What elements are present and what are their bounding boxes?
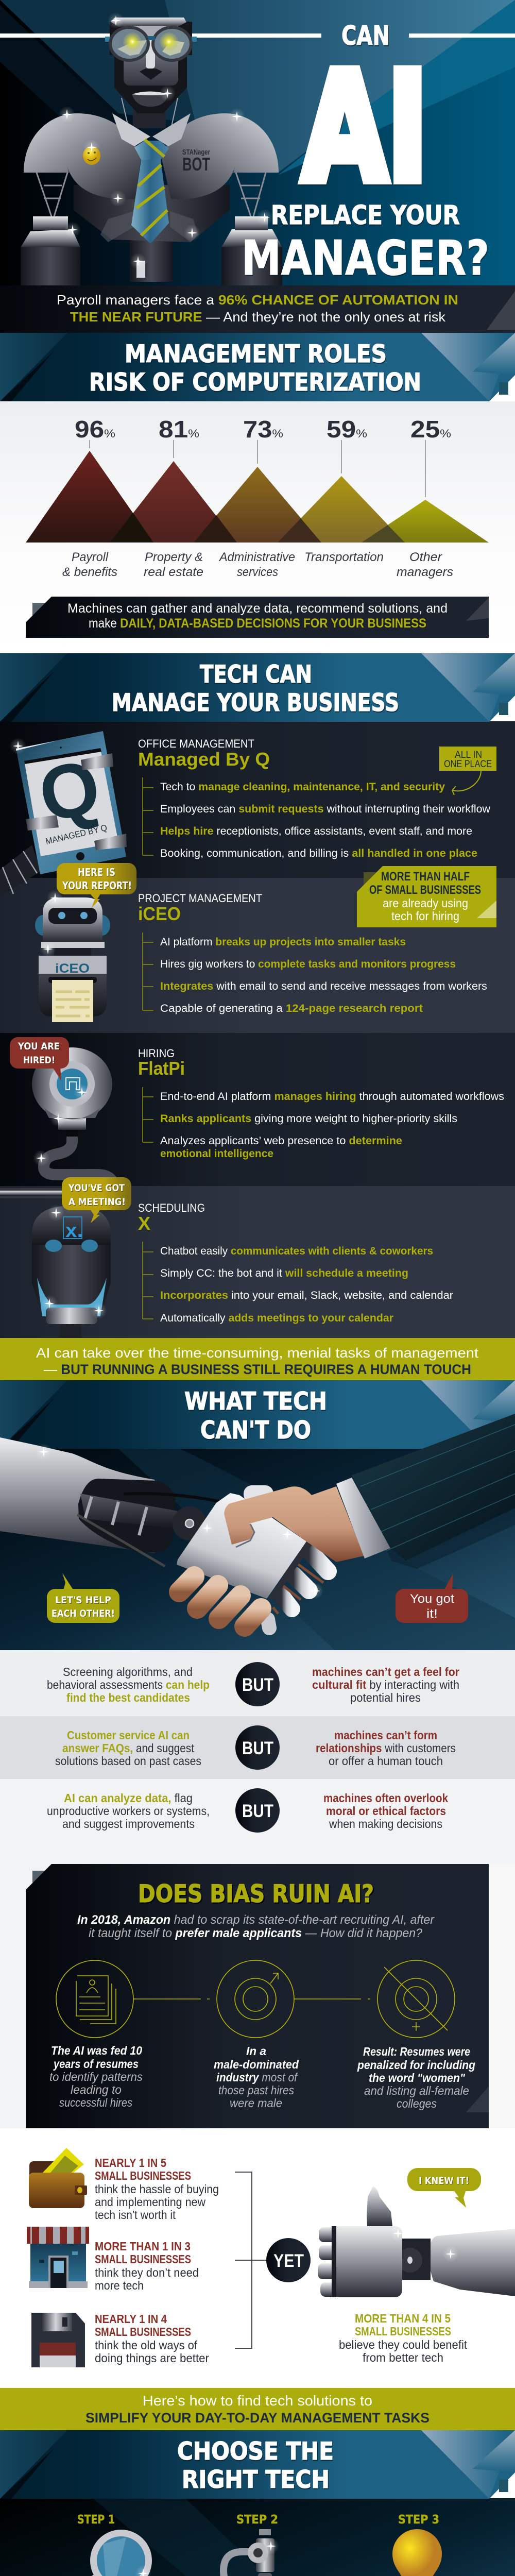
row 1 right: cultural fit by interacting with bbox=[312, 1678, 459, 1691]
heading line 1: WHAT TECH bbox=[184, 1387, 327, 1416]
value 25: 25 % bbox=[410, 416, 451, 443]
note: all in one place: ONE PLACE bbox=[444, 759, 492, 770]
bullets: Simply CC: the bot and it will schedule a meeting bbox=[160, 1267, 408, 1279]
panel: flatpi bbox=[10, 1037, 504, 1185]
row 3 left: AI can analyze data, flag bbox=[64, 1791, 193, 1805]
badge but 1 bbox=[235, 1662, 280, 1706]
row 2 right bbox=[316, 1728, 456, 1768]
panel backgrounds: tech list bbox=[0, 721, 515, 1338]
row 2 left: answer FAQs, and suggest bbox=[62, 1741, 195, 1755]
row 1 left: Screening algorithms, and bbox=[63, 1665, 193, 1679]
icon: iceo robot bbox=[35, 890, 110, 1022]
category labels: managers bbox=[397, 565, 453, 579]
callout: more than half: are already using bbox=[383, 896, 468, 910]
category labels: Administrative bbox=[218, 550, 295, 564]
q logo: Q bbox=[32, 743, 108, 839]
row 3 left bbox=[47, 1791, 210, 1831]
bullets: emotional intelligence bbox=[160, 1148, 273, 1160]
callout: more than half: tech for hiring bbox=[391, 909, 459, 923]
badge but 2: BUT bbox=[242, 1738, 273, 1758]
callout: more than half bbox=[357, 866, 496, 927]
text: fed ten years: years of resumes bbox=[53, 2057, 139, 2071]
bullets: Capable of generating a 124-page research report bbox=[160, 1003, 423, 1014]
step label: STEP 2 bbox=[236, 2513, 278, 2527]
value 96: 96 % bbox=[75, 416, 115, 443]
intro bbox=[77, 1913, 435, 1940]
speech bubble: meeting bbox=[62, 1177, 131, 1223]
text: hassle stat: think the hassle of buying bbox=[95, 2182, 219, 2196]
icon: light bulb bbox=[392, 2529, 442, 2576]
callout: daily decisions: make DAILY, DATA-BASED DECISIONS FOR YOUR BUSINESS bbox=[89, 616, 426, 631]
value 59: 59 % bbox=[327, 416, 367, 443]
category labels: services bbox=[237, 565, 278, 579]
icon: wallet bbox=[29, 2148, 87, 2208]
text: old ways stat: think the old ways of bbox=[95, 2338, 198, 2352]
speech bubble: help each other bbox=[47, 1573, 119, 1623]
row 1 right bbox=[312, 1665, 459, 1704]
title rule left bbox=[0, 33, 321, 38]
bullets: Hires gig workers to complete tasks and monitors progress bbox=[160, 958, 456, 970]
step 2 bbox=[193, 2513, 321, 2576]
bullet tree bbox=[143, 933, 153, 1010]
bullets: Chatbot easily communicates with clients & coworkers bbox=[160, 1245, 433, 1257]
speech bubble: hired: HIRED! bbox=[23, 1055, 55, 1066]
category: PROJECT MANAGEMENT bbox=[138, 892, 262, 905]
text: fed ten years: leading to bbox=[71, 2083, 122, 2096]
title: replace your: REPLACE YOUR bbox=[271, 200, 460, 231]
speech bubble: i knew it: I KNEW IT! bbox=[419, 2175, 469, 2187]
callout: daily decisions: Machines can gather and analyze data, recommend solutions, and bbox=[67, 601, 448, 616]
step 1 bbox=[16, 2513, 176, 2576]
bullets: Booking, communication, and billing is all handled in one place bbox=[160, 848, 477, 859]
text: fed ten years: The AI was fed 10 bbox=[51, 2044, 142, 2057]
speech bubble: meeting: A MEETING! bbox=[68, 1196, 126, 1208]
step label: STEP 1 bbox=[77, 2513, 115, 2527]
speech bubble: meeting: YOU'VE GOT bbox=[68, 1182, 125, 1194]
speech bubble: help each other: EACH OTHER! bbox=[52, 1608, 115, 1619]
text: hassle stat: tech isn't worth it bbox=[95, 2208, 176, 2222]
banner: management roles bbox=[0, 333, 515, 401]
speech bubble: help each other: LET'S HELP bbox=[55, 1595, 111, 1606]
speech bubble: hired bbox=[10, 1037, 69, 1081]
bullets: Helps hire receptionists, office assistants, event staff, and more bbox=[160, 825, 472, 837]
icon: magnifying glass bbox=[46, 2530, 152, 2576]
category labels bbox=[62, 550, 453, 579]
note: all in one place: ALL IN bbox=[455, 750, 482, 760]
band: find tech solutions: SIMPLIFY YOUR DAY-TO-DAY MANAGEMENT TASKS bbox=[85, 2410, 430, 2426]
banner: choose the right tech bbox=[0, 2430, 515, 2499]
row 2 right: or offer a human touch bbox=[329, 1754, 443, 1768]
bullet tree bbox=[143, 1242, 153, 1319]
text: fed ten years bbox=[49, 2044, 143, 2109]
row 1 left bbox=[47, 1665, 210, 1704]
illustration: handshake bbox=[0, 1414, 515, 1628]
badge yet bbox=[266, 2238, 311, 2282]
speech bubble: you got it: You got bbox=[410, 1592, 454, 1606]
icon: microscope bbox=[224, 2529, 285, 2576]
text: four in five stat bbox=[339, 2312, 468, 2364]
bracket connector bbox=[235, 2172, 268, 2348]
text: four in five stat: believe they could benefit bbox=[339, 2338, 468, 2351]
bullets bbox=[160, 1245, 453, 1324]
speech bubble: you got it: it! bbox=[426, 1607, 438, 1621]
note: all in one place bbox=[439, 747, 496, 771]
text: hassle stat: SMALL BUSINESSES bbox=[95, 2169, 191, 2182]
category labels: Payroll bbox=[72, 550, 109, 564]
text: male dominated: were male bbox=[230, 2096, 282, 2110]
row 2 right: relationships with customers bbox=[316, 1741, 456, 1755]
text: no more tech stat: more tech bbox=[95, 2279, 144, 2292]
speech bubble: i knew it bbox=[407, 2168, 481, 2208]
section: risk chart bbox=[0, 333, 515, 653]
text: result: and listing all-female bbox=[364, 2084, 469, 2097]
product name: iCEO bbox=[138, 903, 181, 924]
text: male dominated: those past hires bbox=[218, 2083, 294, 2097]
text: male dominated: In a bbox=[246, 2044, 266, 2058]
bullets bbox=[160, 781, 491, 859]
icon: floppy disk bbox=[31, 2313, 85, 2367]
bullet tree bbox=[143, 777, 153, 855]
speech bubble: report: YOUR REPORT! bbox=[62, 879, 132, 892]
text: result: penalized for including bbox=[357, 2058, 475, 2072]
icon: male symbol bbox=[217, 1960, 294, 2038]
bullets: Incorporates into your email, Slack, website, and calendar bbox=[160, 1290, 453, 1301]
callout: daily decisions bbox=[26, 597, 489, 638]
icon: tablet robot bbox=[0, 731, 127, 897]
intro: it taught itself to prefer male applicants — How did it happen? bbox=[89, 1926, 423, 1940]
row 2 left: solutions based on past cases bbox=[55, 1754, 201, 1768]
banner: tech can manage bbox=[0, 653, 515, 722]
text: result: Result: Resumes were bbox=[363, 2045, 470, 2058]
badge but 2 bbox=[235, 1725, 280, 1770]
connector 1 bbox=[133, 1998, 210, 1999]
speech bubble: report: HERE IS bbox=[78, 866, 115, 878]
speech bubble: you got it bbox=[396, 1573, 468, 1623]
icon: x robot bbox=[0, 1188, 111, 1338]
text: four in five stat: SMALL BUSINESSES bbox=[355, 2325, 451, 2338]
value 73: 73% bbox=[243, 416, 283, 443]
category: SCHEDULING bbox=[138, 1201, 205, 1214]
text: old ways stat: doing things are better bbox=[95, 2351, 209, 2365]
bullets: End-to-end AI platform manages hiring through automated workflows bbox=[160, 1091, 504, 1103]
row 3 left: unproductive workers or systems, bbox=[47, 1804, 210, 1818]
row 2 right: machines can’t form bbox=[334, 1728, 437, 1742]
text: four in five stat: MORE THAN 4 IN 5 bbox=[355, 2312, 451, 2325]
row 1 left: find the best candidates bbox=[66, 1691, 190, 1704]
connector 2 bbox=[294, 1998, 370, 1999]
panel: iceo bbox=[35, 863, 496, 1022]
text: result: colleges bbox=[397, 2097, 437, 2110]
heading line 1: TECH CAN bbox=[200, 660, 312, 689]
heading line 2: CAN'T DO bbox=[200, 1416, 311, 1445]
callout: more than half: OF SMALL BUSINESSES bbox=[369, 883, 481, 897]
speech bubble: report bbox=[57, 863, 136, 908]
band: find tech solutions: Here’s how to find tech solutions to bbox=[143, 2393, 372, 2409]
text: hassle stat: and implementing new bbox=[95, 2195, 205, 2209]
product name: Managed By Q bbox=[138, 749, 270, 770]
text: result bbox=[357, 2045, 475, 2110]
band: human touch: — BUT RUNNING A BUSINESS STILL REQUIRES A HUMAN TOUCH bbox=[44, 1362, 471, 1377]
band: human touch bbox=[0, 1338, 515, 1380]
text: old ways stat: NEARLY 1 IN 4 bbox=[95, 2312, 167, 2326]
bullets bbox=[160, 1091, 504, 1160]
title: AI: AI bbox=[302, 41, 428, 215]
bullets bbox=[160, 936, 487, 1014]
product name: FlatPi bbox=[138, 1058, 185, 1079]
row 1 right: machines can’t get a feel for bbox=[312, 1665, 459, 1679]
text: old ways stat bbox=[95, 2312, 209, 2365]
row 1 left: behavioral assessments can help bbox=[47, 1678, 210, 1691]
icon: flatpi robot bbox=[32, 1047, 114, 1185]
title: can: CAN bbox=[341, 21, 390, 52]
title rule right bbox=[409, 33, 515, 38]
row 1 right: potential hires bbox=[350, 1691, 421, 1704]
text: no more tech stat: think they don’t need bbox=[95, 2266, 199, 2279]
badge but 3: BUT bbox=[242, 1801, 273, 1821]
intro band bbox=[0, 285, 515, 333]
chest label bot: BOT bbox=[182, 154, 210, 175]
bullets: Integrates with email to send and receive messages from workers bbox=[160, 980, 487, 992]
arrow: note to bullet bbox=[452, 771, 481, 795]
intro: In 2018, Amazon had to scrap its state-of-the-art recruiting AI, after bbox=[77, 1913, 435, 1927]
bullets: Ranks applicants giving more weight to higher-priority skills bbox=[160, 1113, 457, 1125]
x logo: x. bbox=[65, 1220, 83, 1242]
bullets: AI platform breaks up projects into smaller tasks bbox=[160, 936, 406, 948]
row 3 right: when making decisions bbox=[329, 1817, 442, 1831]
bullets: Tech to manage cleaning, maintenance, IT, and security bbox=[160, 781, 445, 793]
text: fed ten years: successful hires bbox=[59, 2096, 132, 2109]
icon: female symbol crossed bbox=[377, 1960, 455, 2038]
text: no more tech stat: SMALL BUSINESSES bbox=[95, 2252, 191, 2266]
category labels: Transportation bbox=[304, 550, 384, 564]
value 81: 81 % bbox=[159, 416, 199, 443]
bullet tree bbox=[143, 1087, 153, 1142]
product name: X bbox=[138, 1213, 150, 1234]
category labels: Other bbox=[409, 550, 442, 564]
section: choose the right tech bbox=[0, 2430, 515, 2576]
heading line 2: RISK OF COMPUTERIZATION bbox=[89, 368, 421, 397]
category: HIRING bbox=[138, 1047, 175, 1060]
comparison rows bbox=[0, 1650, 515, 2388]
hero section bbox=[0, 0, 515, 286]
intro line 1: Payroll managers face a 96% CHANCE OF AUTOMATION IN bbox=[57, 292, 458, 308]
step 3 bbox=[348, 2513, 490, 2576]
text: hassle stat bbox=[95, 2156, 219, 2222]
category labels: Property & bbox=[145, 550, 203, 564]
text: no more tech stat: MORE THAN 1 IN 3 bbox=[95, 2240, 191, 2253]
row 2 left bbox=[55, 1728, 201, 1768]
row 3 left: and suggest improvements bbox=[62, 1817, 195, 1831]
heading line 1: MANAGEMENT ROLES bbox=[125, 340, 387, 368]
heading: DOES BIAS RUIN AI? bbox=[138, 1880, 374, 1908]
badge yet: YET bbox=[273, 2251, 304, 2271]
row 3 right bbox=[323, 1791, 448, 1831]
panel: managed by q bbox=[0, 731, 496, 897]
row 2 left: Customer service AI can bbox=[67, 1728, 190, 1742]
row 3 right: moral or ethical factors bbox=[326, 1804, 446, 1818]
step label: STEP 3 bbox=[398, 2513, 439, 2527]
text: old ways stat: SMALL BUSINESSES bbox=[95, 2325, 191, 2338]
icon: resumes bbox=[56, 1960, 133, 2038]
badge but 1: BUT bbox=[242, 1675, 273, 1695]
category labels: & benefits bbox=[62, 565, 117, 579]
robot chest label: iCEO bbox=[55, 961, 90, 976]
text: male dominated: male-dominated bbox=[214, 2058, 299, 2071]
tablet caption: MANAGED BY Q bbox=[45, 823, 108, 846]
heading line 1: CHOOSE THE bbox=[177, 2437, 334, 2466]
callout: more than half: MORE THAN HALF bbox=[381, 870, 470, 884]
panel: does bias ruin ai bbox=[26, 1864, 489, 2128]
row 3 right: machines often overlook bbox=[323, 1791, 448, 1805]
robot manager illustration bbox=[21, 12, 282, 285]
intro line 2: THE NEAR FUTURE — And they’re not the only ones at risk bbox=[70, 309, 446, 325]
text: no more tech stat bbox=[95, 2240, 199, 2292]
text: four in five stat: from better tech bbox=[363, 2351, 443, 2364]
bullets: Analyzes applicants’ web presence to determine bbox=[160, 1135, 402, 1147]
text: male dominated bbox=[214, 2044, 299, 2110]
bullets: Automatically adds meetings to your calendar bbox=[160, 1312, 393, 1324]
text: result: the word "women" bbox=[369, 2071, 466, 2084]
triangle chart bbox=[26, 440, 489, 543]
banner: what tech can't do bbox=[0, 1380, 515, 1449]
category labels: real estate bbox=[144, 565, 203, 579]
text: fed ten years: to identify patterns bbox=[49, 2070, 143, 2083]
speech bubble: hired: YOU ARE bbox=[18, 1041, 60, 1052]
band: find tech solutions bbox=[0, 2388, 515, 2431]
band: human touch: AI can take over the time-consuming, menial tasks of management bbox=[36, 1345, 479, 1361]
icon: storefront bbox=[27, 2227, 89, 2288]
category: OFFICE MANAGEMENT bbox=[138, 737, 254, 750]
chest label: STANager bbox=[182, 148, 210, 157]
text: male dominated: industry most of bbox=[216, 2071, 298, 2084]
badge but 3 bbox=[235, 1788, 280, 1833]
panel: x scheduling bbox=[0, 1177, 453, 1338]
handshake scene background bbox=[0, 1449, 515, 1650]
heading line 2: MANAGE YOUR BUSINESS bbox=[112, 689, 399, 717]
bullets: Employees can submit requests without interrupting their workflow bbox=[160, 803, 491, 815]
section: small business attitudes bbox=[27, 2148, 515, 2367]
heading line 2: RIGHT TECH bbox=[182, 2466, 330, 2494]
text: hassle stat: NEARLY 1 IN 5 bbox=[95, 2156, 166, 2170]
illustration: robot thumbs up bbox=[318, 2187, 515, 2297]
